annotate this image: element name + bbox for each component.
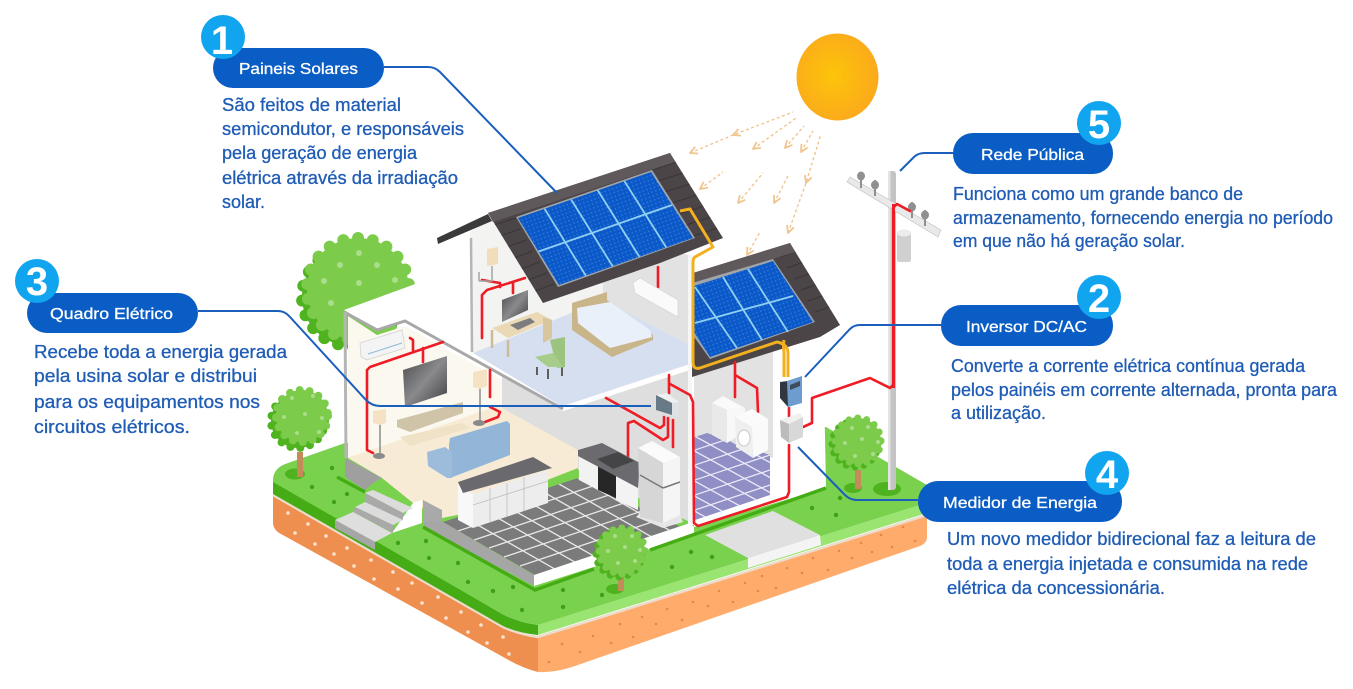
annex roof — [692, 243, 840, 377]
meter box — [780, 413, 803, 443]
description: semicondutor, e responsáveis — [222, 119, 464, 139]
panel: paineis solares: 1 — [211, 19, 233, 63]
panel: paineis solares — [201, 15, 464, 212]
grass: top — [273, 427, 927, 625]
annex wall — [692, 335, 826, 527]
leader line: quadro — [198, 311, 651, 406]
leader line: medidor — [798, 447, 918, 500]
annex solar panel — [692, 259, 815, 359]
roof section outline — [344, 312, 563, 409]
wire from box to pole — [803, 378, 893, 427]
living room floor — [348, 405, 578, 518]
badge 1 — [201, 15, 245, 59]
bedroom floor — [473, 300, 690, 407]
pill — [941, 305, 1113, 346]
inverter — [780, 376, 802, 407]
description: pela geração de energia — [222, 143, 418, 163]
description: Um novo medidor bidirecional faz a leitura de — [947, 529, 1316, 549]
description: em que não há geração solar. — [953, 231, 1185, 251]
slab strip — [563, 364, 690, 411]
description — [953, 184, 1333, 251]
back tree — [302, 238, 409, 346]
tv cabinet — [397, 402, 470, 446]
television — [403, 356, 447, 407]
description: pela usina solar e distribui — [34, 366, 257, 386]
badge 4 — [1085, 451, 1129, 495]
red AC wiring — [367, 204, 910, 526]
red wire along the pole — [892, 204, 895, 388]
description: para os equipamentos nos — [34, 392, 260, 412]
description: pelos painéis em corrente alternada, pronta para — [951, 380, 1338, 400]
description: armazenamento, fornecendo energia no período — [953, 208, 1333, 228]
panel: rede publica: 5 — [1088, 103, 1110, 147]
steps — [335, 490, 422, 550]
kitchen back wall — [502, 370, 690, 522]
main roof — [437, 153, 723, 303]
panel: rede publica — [953, 101, 1333, 251]
yellow DC cables — [680, 209, 788, 377]
panel: quadro eletrico — [15, 259, 288, 437]
electric panel — [656, 393, 679, 417]
badge 2 — [1077, 275, 1121, 319]
description: elétrica da concessionária. — [947, 578, 1165, 598]
panel: rede publica: Rede Pública — [981, 147, 1084, 164]
white roof section — [344, 230, 560, 407]
upper left wall — [470, 190, 603, 353]
leader line: inversor — [805, 325, 941, 377]
roof tiles — [488, 153, 723, 303]
plinth side — [423, 522, 534, 586]
description: circuitos elétricos. — [34, 417, 190, 437]
upper lamp — [479, 247, 498, 281]
green chair — [535, 337, 565, 379]
description — [222, 95, 464, 212]
kitchen floor grid — [458, 478, 688, 569]
description: a utilização. — [951, 403, 1046, 423]
panel: quadro eletrico: Quadro Elétrico — [50, 306, 173, 323]
house — [335, 153, 910, 596]
grass: left edge — [273, 480, 538, 635]
panel: paineis solares: Paineis Solares — [239, 61, 358, 78]
laundry floor — [692, 433, 770, 520]
badge 3 — [15, 259, 59, 303]
desk — [492, 290, 552, 357]
description: toda a energia injetada e consumida na rede — [947, 554, 1308, 574]
lower air conditioner — [360, 330, 405, 360]
bed — [572, 292, 653, 357]
description: elétrica através da irradiação — [222, 168, 458, 188]
panel: inversor — [941, 275, 1338, 423]
description — [947, 529, 1316, 598]
monitor — [502, 290, 528, 322]
left floor lamp — [373, 409, 386, 459]
description — [951, 356, 1338, 423]
right floor lamp — [473, 369, 487, 426]
panel: inversor: 2 — [1088, 277, 1110, 321]
grass dots — [310, 466, 842, 612]
walkway — [705, 511, 821, 568]
description — [34, 342, 288, 437]
kitchen island — [458, 457, 552, 528]
description: Funciona como um grande banco de — [953, 184, 1243, 204]
front tree — [596, 528, 645, 594]
sun — [796, 34, 878, 120]
insulators — [857, 172, 929, 226]
leader line: painel — [384, 67, 557, 193]
pill — [27, 293, 198, 333]
living room wall — [348, 316, 560, 458]
stove and counters — [578, 443, 640, 510]
soil: left face — [273, 495, 538, 672]
foundation grey — [345, 458, 382, 490]
sun rays — [690, 112, 821, 255]
left tree — [271, 390, 328, 480]
pill — [213, 48, 384, 88]
panel: quadro eletrico: 3 — [26, 260, 48, 304]
main solar panel — [516, 170, 695, 287]
utility pole — [847, 171, 941, 496]
plinth front — [534, 523, 694, 586]
panel: inversor: Inversor DC/AC — [966, 319, 1087, 336]
soil dots left — [286, 511, 511, 656]
sofa — [427, 421, 510, 478]
grass: right edge — [538, 500, 927, 635]
dryer — [712, 396, 745, 443]
leader line: rede — [900, 153, 953, 171]
panel: medidor — [918, 451, 1316, 598]
transformer — [897, 230, 911, 262]
description: Converte a corrente elétrica contínua gerada — [951, 356, 1306, 376]
crossarm — [847, 177, 941, 237]
upper air conditioner — [633, 278, 678, 317]
annex back wall — [694, 350, 773, 458]
ground block — [273, 427, 927, 672]
laundry floor grid — [694, 436, 770, 517]
upper right wall — [603, 250, 690, 345]
roof eave — [437, 214, 492, 244]
fridge — [636, 441, 683, 528]
soil dots right — [548, 526, 916, 663]
soil: right face — [538, 515, 927, 672]
right tree — [832, 418, 881, 493]
grass shadow line — [423, 488, 826, 590]
description: São feitos de material — [222, 95, 401, 115]
washing machine — [735, 409, 768, 458]
panel: medidor: Medidor de Energia — [943, 495, 1097, 512]
badge 5 — [1077, 101, 1121, 145]
description: solar. — [222, 192, 265, 212]
roof ridge — [488, 153, 675, 222]
kitchen floor — [443, 478, 690, 575]
pill — [953, 133, 1113, 174]
wire at pole top — [893, 204, 910, 211]
pill — [918, 481, 1122, 522]
description: Recebe toda a energia gerada — [34, 342, 288, 362]
panel: medidor: 4 — [1096, 453, 1119, 497]
